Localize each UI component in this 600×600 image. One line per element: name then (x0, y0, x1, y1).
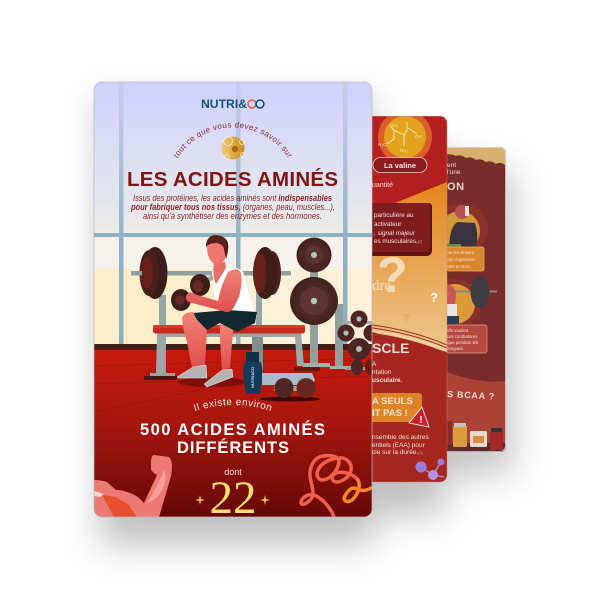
orange spiral icon (301, 456, 371, 517)
back card edge (400, 148, 506, 452)
top tan wave (447, 147, 506, 166)
left shoe (177, 365, 207, 378)
middle card (372, 116, 447, 482)
dark callout: es musculaires.[2] (374, 238, 422, 245)
bench (144, 325, 320, 380)
warning box (372, 393, 422, 422)
back card heading: ent (447, 162, 456, 169)
sky background (94, 82, 372, 234)
title: LES ACIDES AMINÉS (127, 168, 338, 191)
quantity text: uantité (372, 182, 393, 189)
athlete callout: urs courbatures (448, 334, 477, 339)
senior illustration (447, 203, 488, 248)
shorts (193, 310, 257, 332)
athlete callout (447, 325, 487, 353)
senior callout: orts en EAA. (448, 264, 472, 269)
orange panel (372, 182, 447, 352)
senior callout: oin d'optimiser (448, 257, 476, 262)
molecule circle: NH₂ (400, 148, 408, 153)
headline number: 500 ACIDES AMINÉS (140, 420, 325, 439)
warning box: IT PAS ! (372, 408, 408, 419)
question marks: ? (403, 313, 410, 325)
dark callout (372, 203, 432, 256)
warning box: A SEULS (372, 396, 413, 407)
back card (447, 147, 506, 452)
intro paragraph: pour fabriquer tous nos tissus, (organes, peau, muscles...), (130, 202, 335, 212)
molecule circle: OH (415, 134, 422, 139)
warning triangle: ! (419, 415, 423, 426)
red diagonal header (372, 116, 447, 203)
senior callout (447, 247, 484, 271)
barbell stands (150, 290, 263, 376)
shaker bottle: NUTRI&CO (250, 367, 255, 388)
soft drop shadow (100, 100, 513, 545)
senior callout: ou les seniors (448, 250, 474, 255)
muscle text: ntation (372, 369, 392, 376)
front card (94, 82, 372, 517)
supplement products (447, 421, 506, 452)
infographic stack of three cards (80, 80, 532, 564)
molecule circle: H₃C (378, 142, 387, 147)
muscle text: A (372, 361, 377, 368)
molecule circle: CH₃ (390, 123, 398, 128)
middle card edge (340, 116, 447, 482)
intro paragraph (130, 193, 335, 221)
warning triangle (409, 407, 429, 427)
athlete callout: que pendant les (448, 340, 478, 345)
sparkles (195, 495, 270, 505)
athlete illustration (447, 276, 497, 326)
dont: dont (224, 467, 242, 477)
barbell bar (167, 271, 281, 276)
molecule circle (378, 116, 432, 158)
left barbell plates (140, 247, 168, 299)
EAA text (372, 434, 429, 456)
hair (206, 235, 228, 259)
dark callout: particulière au (374, 212, 414, 219)
left leg (182, 312, 207, 368)
EAA text: cle sur la durée.[3] (372, 449, 423, 456)
dark callout: , signal majeur (374, 230, 416, 237)
arm (186, 269, 241, 312)
question marks (372, 257, 438, 322)
front card edge (94, 82, 372, 517)
floor dumbbell with box (260, 373, 320, 402)
intro paragraph: ainsi qu'à synthétiser des enzymes et des hormones. (143, 211, 322, 221)
gym window view (94, 82, 372, 350)
face (207, 241, 226, 264)
neck (213, 262, 226, 284)
back card heading (447, 162, 464, 190)
amino acid icon (222, 136, 246, 160)
BCAA question: S BCAA ? (447, 389, 495, 401)
floor shadow (178, 377, 246, 387)
muscle heading: SCLE (372, 340, 409, 356)
existe environ: Il existe environ (194, 398, 272, 412)
athlete callout: longues. (448, 346, 464, 351)
red gym floor (94, 350, 372, 517)
dark callout: activateur (374, 221, 401, 228)
weight tree (290, 238, 372, 369)
purple molecule (416, 458, 444, 480)
back card heading: l'une (447, 169, 461, 176)
dumbbell lower (171, 289, 191, 311)
logo (202, 99, 265, 109)
right shoe (204, 369, 233, 387)
headline number: DIFFÉRENTS (177, 438, 289, 457)
right barbell plates (253, 247, 281, 299)
muscle text: usculaire. (372, 377, 403, 384)
question marks: ? (430, 290, 438, 305)
tank top (212, 267, 257, 317)
bottom panel (447, 372, 506, 452)
question marks: ? (377, 247, 408, 303)
muscle text (372, 362, 402, 382)
EAA text: nsemble des autres (372, 434, 429, 441)
pill: La valine: La valine (384, 161, 416, 170)
small dumbbell rack (338, 310, 380, 375)
question marks: dre (372, 278, 391, 294)
EAA text: entiels (EAA) pour (372, 442, 426, 449)
logo: NUTRI& (201, 97, 247, 111)
intro paragraph: Issus des protéines, les acides aminés sont indispensables (133, 193, 332, 203)
curved tagline: tout ce que vous devez savoir sur (174, 122, 292, 158)
right leg (220, 323, 233, 370)
pill: La valine (373, 158, 427, 172)
athlete callout: tifs voulant (448, 328, 469, 333)
back card heading: ON (447, 181, 465, 193)
number 22: 22 (210, 472, 256, 524)
shaker bottle (243, 352, 263, 394)
headline number (140, 420, 325, 457)
lower red wave (378, 334, 447, 482)
flexed arm icon (94, 455, 172, 517)
dumbbell upper (190, 274, 214, 296)
athlete (171, 235, 257, 387)
